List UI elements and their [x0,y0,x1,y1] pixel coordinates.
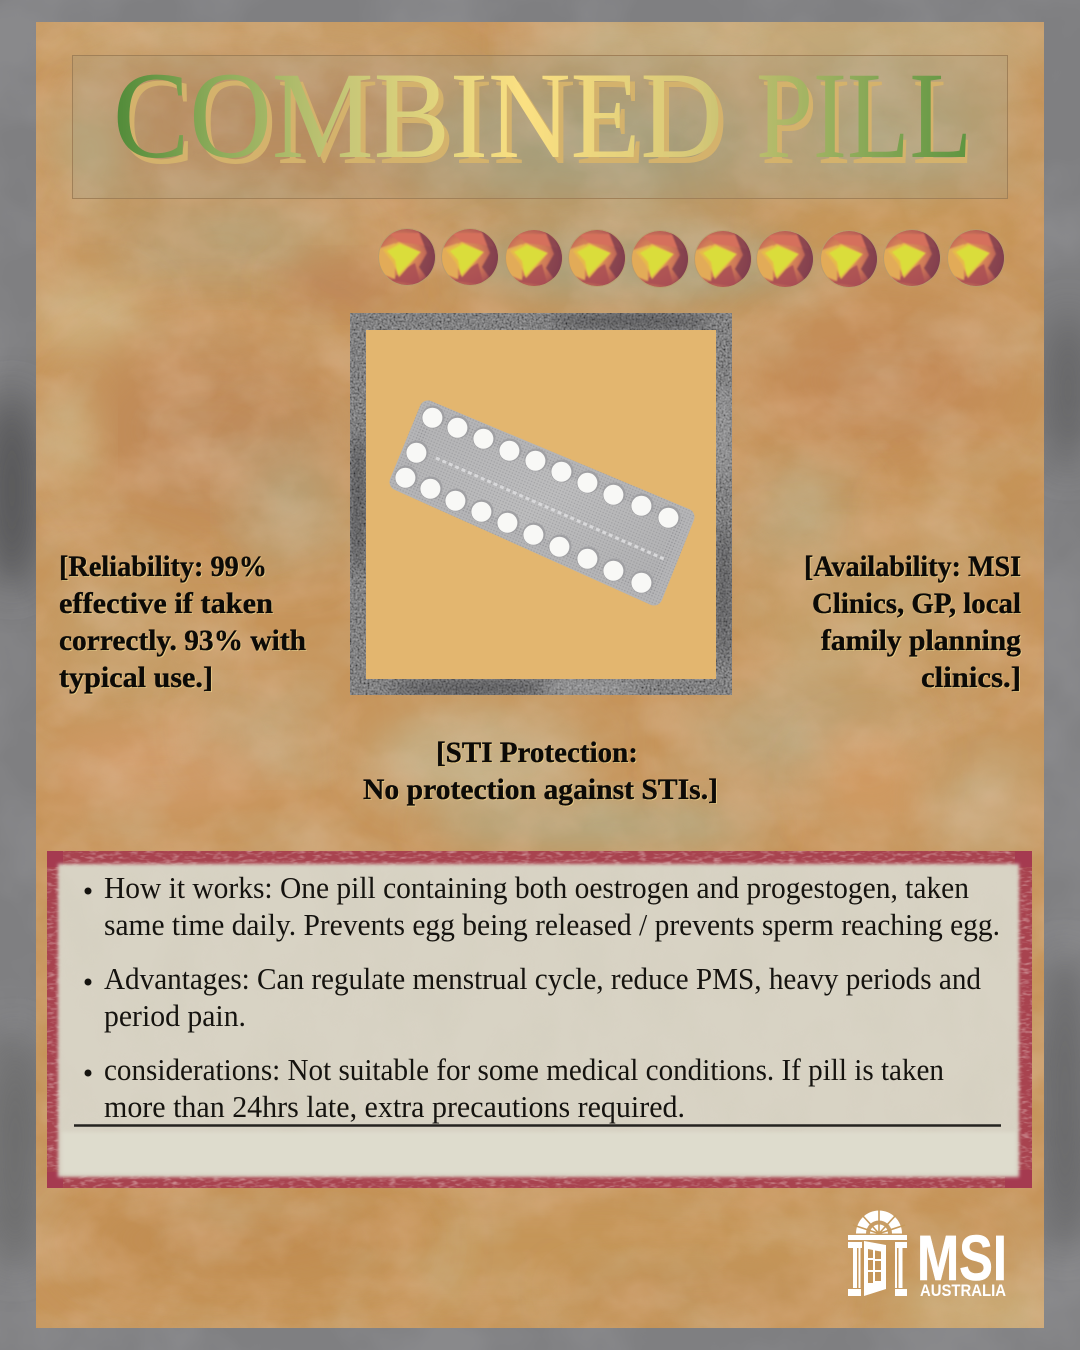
photo frame [350,313,732,696]
title: Combined Pill: COMBINED [118,53,728,190]
STI protection text: No protection against STIs.] [364,774,719,807]
bullet: advantages [84,961,981,1033]
bullet: how it works: How it works: One pill containing both oestrogen and progestogen, taken [104,870,969,905]
title: Combined Pill: COMBINED [113,47,723,184]
availability text: [Availability: MSI [804,550,1021,583]
reliability text: correctly. 93% with [60,625,307,658]
rule under the text [74,1123,1001,1126]
MSI Australia logo [848,1209,1007,1300]
availability text [804,550,1022,695]
reliability text: effective if taken [59,587,273,620]
bullet: considerations: considerations: Not suitable for some medical conditions. If pill is taken [104,1052,944,1087]
bullet: considerations: more than 24hrs late, extra precautions required. [104,1089,685,1124]
reliability text [59,550,307,695]
reliability text: typical use.] [59,661,213,694]
bullet: advantages: period pain. [104,998,246,1033]
reliability text: effective if taken [60,588,274,621]
reliability text: [Reliability: 99% [60,551,268,584]
information panel [47,851,1032,1188]
rating row: ten pills [377,227,1008,288]
title: Combined Pill: PILL [761,53,974,190]
wordmark: MSI [917,1222,1007,1294]
title: Combined Pill: PILL [756,47,972,184]
reliability text: [Reliability: 99% [59,550,267,583]
title band [72,47,1008,198]
contraceptive pill blister pack [394,406,686,597]
availability text: Clinics, GP, local [812,587,1021,620]
availability text: clinics.] [921,661,1021,694]
icon: door with fanlight [848,1209,907,1296]
STI protection text: [STI Protection: [437,737,639,770]
wordmark: AUSTRALIA [920,1282,1006,1300]
availability text: [Availability: MSI [805,551,1022,584]
STI protection text: [STI Protection: [436,736,638,769]
availability text: family planning [821,624,1021,657]
availability text: family planning [822,625,1022,658]
bullet: how it works [84,870,1000,942]
STI protection text [363,736,719,807]
reliability text: typical use.] [60,662,214,695]
reliability text: correctly. 93% with [59,624,306,657]
availability text: Clinics, GP, local [813,588,1022,621]
bullet: how it works: same time daily. Prevents egg being released / prevents sperm reaching egg. [104,907,1000,942]
STI protection text: No protection against STIs.] [363,773,718,806]
bullet: advantages: Advantages: Can regulate menstrual cycle, reduce PMS, heavy periods and [104,961,981,996]
bullet: considerations [84,1052,944,1124]
availability text: clinics.] [922,662,1022,695]
